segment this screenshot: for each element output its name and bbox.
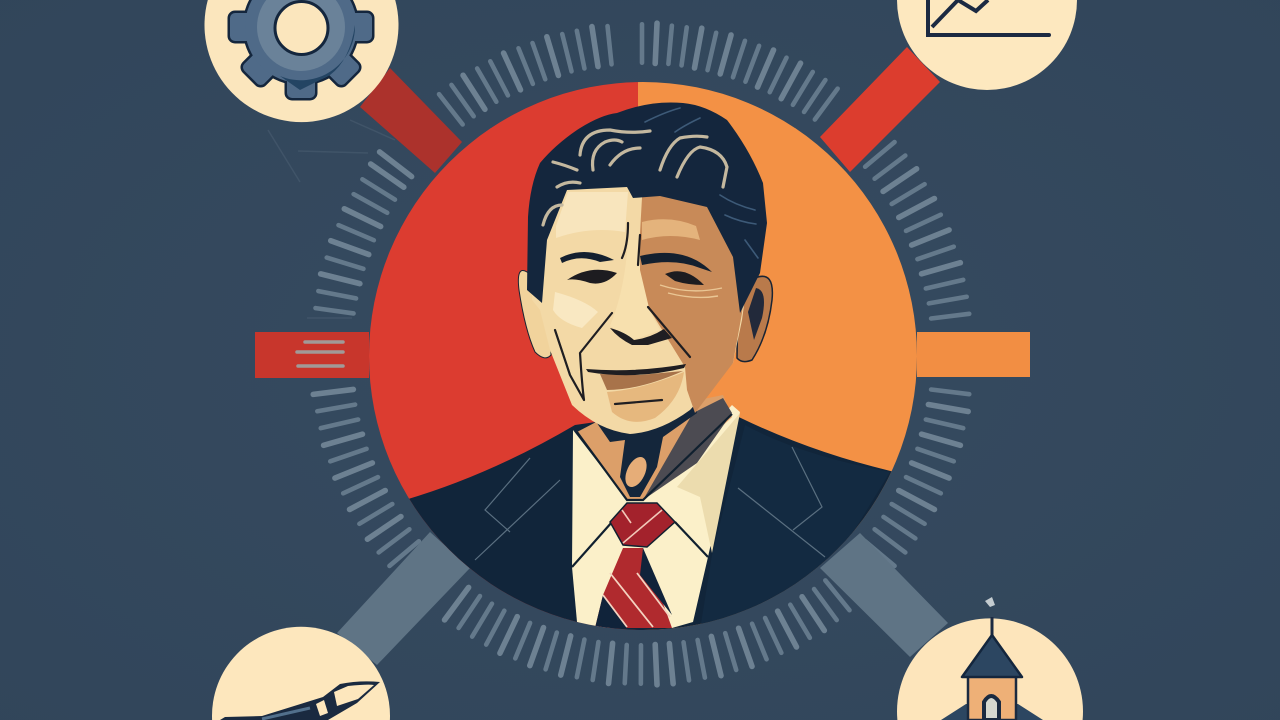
nose underside xyxy=(610,328,672,345)
circle: orange half xyxy=(638,82,917,630)
hair highlights xyxy=(543,130,727,225)
icon: gear badge xyxy=(205,0,399,122)
suit jacket xyxy=(409,417,892,630)
suit shading xyxy=(701,530,855,624)
background scratches xyxy=(268,120,395,318)
under chin shadow xyxy=(597,406,697,497)
gear ring xyxy=(257,0,345,71)
connector bar: lower left grey xyxy=(337,532,470,665)
tie blade xyxy=(595,548,672,628)
right ear xyxy=(737,276,772,362)
badge circle xyxy=(205,0,399,122)
suit lapel lines xyxy=(475,447,825,560)
icon: rocket badge xyxy=(212,627,390,720)
tie blade right shadow xyxy=(640,548,672,615)
hair mass xyxy=(527,102,767,313)
hair xyxy=(527,102,767,313)
gear fill xyxy=(230,0,372,98)
forehead lit band on shadow side xyxy=(642,219,700,240)
badge circle xyxy=(897,618,1083,720)
ticks: bottom arc xyxy=(441,577,853,688)
tie blade left wedge xyxy=(595,595,627,628)
face lines xyxy=(555,223,690,404)
neck grey shadow xyxy=(643,398,732,500)
ticks on left red bar xyxy=(297,342,343,366)
shirt xyxy=(572,405,740,628)
ticks: lower left arc xyxy=(310,386,422,569)
gear hole xyxy=(275,2,328,54)
tie knot stripe xyxy=(622,510,662,543)
connector bar: upper left red xyxy=(360,68,462,173)
chart line xyxy=(932,0,988,27)
cheek highlight xyxy=(553,292,598,328)
ticks: top arc xyxy=(436,20,841,128)
gear outline xyxy=(230,0,372,98)
chart axes xyxy=(928,0,1049,35)
left ear xyxy=(518,270,551,358)
ticks: lower right arc xyxy=(862,387,972,569)
face xyxy=(532,187,744,434)
church window xyxy=(984,696,999,720)
tie xyxy=(595,503,675,628)
shirt shadow xyxy=(677,413,740,553)
ticks: upper right arc xyxy=(862,139,972,321)
face shadow side xyxy=(640,196,743,413)
forehead highlight xyxy=(556,192,628,238)
church tower xyxy=(968,676,1016,720)
hair blue sheen xyxy=(645,108,758,258)
weather vane xyxy=(985,597,995,607)
connector bar: upper right red xyxy=(820,47,940,172)
right ear inner xyxy=(748,288,764,340)
rocket body xyxy=(220,681,380,720)
nose bright xyxy=(638,252,648,306)
brows xyxy=(560,252,712,272)
rocket stripe xyxy=(316,700,328,716)
mouth xyxy=(586,364,686,375)
circle: red half xyxy=(369,82,638,630)
church roof xyxy=(962,635,1022,677)
collar lines xyxy=(572,414,732,567)
tie knot xyxy=(610,503,675,547)
eyes xyxy=(567,270,704,285)
neck xyxy=(577,395,732,500)
church side roofs xyxy=(941,704,1043,720)
badge circle xyxy=(897,0,1077,90)
rocket hull line xyxy=(262,708,310,719)
eye wrinkles xyxy=(660,285,722,297)
radial tick marks xyxy=(310,20,972,688)
chin tone xyxy=(607,372,684,422)
tie stripes xyxy=(603,573,670,627)
neck highlight xyxy=(625,457,647,487)
church spire xyxy=(990,617,994,636)
lower lip xyxy=(600,371,683,390)
icon: church badge xyxy=(897,597,1083,720)
ticks: upper left arc xyxy=(313,148,416,316)
badge circle xyxy=(212,627,390,720)
rocket window xyxy=(334,685,374,706)
icon: chart badge xyxy=(897,0,1077,90)
connector bar: left red xyxy=(255,332,369,378)
main circle with portrait xyxy=(369,82,917,640)
connector bar: right orange xyxy=(917,332,1030,377)
connector bar: lower right grey xyxy=(820,533,948,657)
gear shadow xyxy=(280,25,355,90)
